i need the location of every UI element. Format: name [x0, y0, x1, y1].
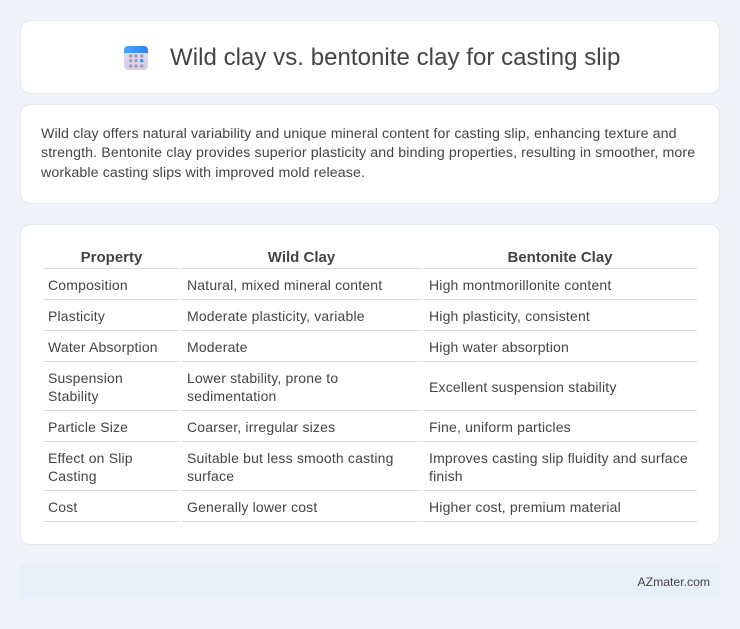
- row: plasticity: Moderate plasticity, variable: [187, 308, 365, 324]
- summary text: Wild clay offers natural variability and unique mineral content for casting slip, enhancing texture and: [41, 126, 677, 142]
- row: cost: Higher cost, premium material: [429, 499, 621, 515]
- row: effect on slip casting: Improves casting slip fluidity and surface: [429, 450, 688, 466]
- panel: comparison table: [20, 224, 720, 545]
- row: suspension stability: Stability: [48, 388, 99, 404]
- row: composition: High montmorillonite content: [429, 277, 611, 293]
- row: plasticity: [48, 308, 590, 324]
- row: suspension stability: sedimentation: [187, 388, 277, 404]
- row: water absorption: Moderate: [187, 339, 248, 355]
- row: effect on slip casting: Casting: [48, 468, 97, 484]
- row: effect on slip casting: surface: [187, 468, 234, 484]
- footer credit: AZmater.com: [638, 575, 710, 589]
- row: water absorption: Water Absorption: [48, 339, 158, 355]
- row: suspension stability: Suspension: [48, 370, 123, 386]
- table header: Wild Clay: [268, 249, 335, 266]
- table header: Bentonite Clay: [507, 249, 612, 266]
- row: particle size: Coarser, irregular sizes: [187, 419, 335, 435]
- panel: summary: [20, 104, 720, 204]
- title: Wild clay vs. bentonite clay for casting slip: [170, 44, 620, 71]
- row: composition: [48, 277, 612, 293]
- row: particle size: [48, 419, 571, 435]
- summary text: [41, 126, 695, 181]
- panel: title card: [20, 20, 720, 94]
- table header: Property: [81, 249, 142, 266]
- row: effect on slip casting: finish: [429, 468, 463, 484]
- row: suspension stability: [48, 370, 616, 404]
- row: particle size: Fine, uniform particles: [429, 419, 571, 435]
- row: plasticity: High plasticity, consistent: [429, 308, 590, 324]
- row: water absorption: High water absorption: [429, 339, 569, 355]
- row: composition: Natural, mixed mineral content: [187, 277, 382, 293]
- row: cost: Generally lower cost: [187, 499, 317, 515]
- row: cost: Cost: [48, 499, 78, 515]
- row: plasticity: Plasticity: [48, 308, 105, 324]
- icon: calendar: [124, 46, 148, 70]
- footer bar: [20, 565, 720, 599]
- table header: [81, 249, 612, 266]
- row: suspension stability: Lower stability, prone to: [187, 370, 338, 386]
- row: effect on slip casting: Suitable but less smooth casting: [187, 450, 394, 466]
- row: cost: [48, 499, 621, 515]
- summary text: strength. Bentonite clay provides superior plasticity and binding properties, resulting in smoother, more: [41, 145, 695, 161]
- summary text: workable casting slips with improved mold release.: [41, 165, 365, 181]
- row: particle size: Particle Size: [48, 419, 128, 435]
- row: water absorption: [48, 339, 569, 355]
- row: composition: Composition: [48, 277, 128, 293]
- row: effect on slip casting: Effect on Slip: [48, 450, 133, 466]
- row: suspension stability: Excellent suspension stability: [429, 379, 616, 395]
- row: effect on slip casting: [48, 450, 688, 484]
